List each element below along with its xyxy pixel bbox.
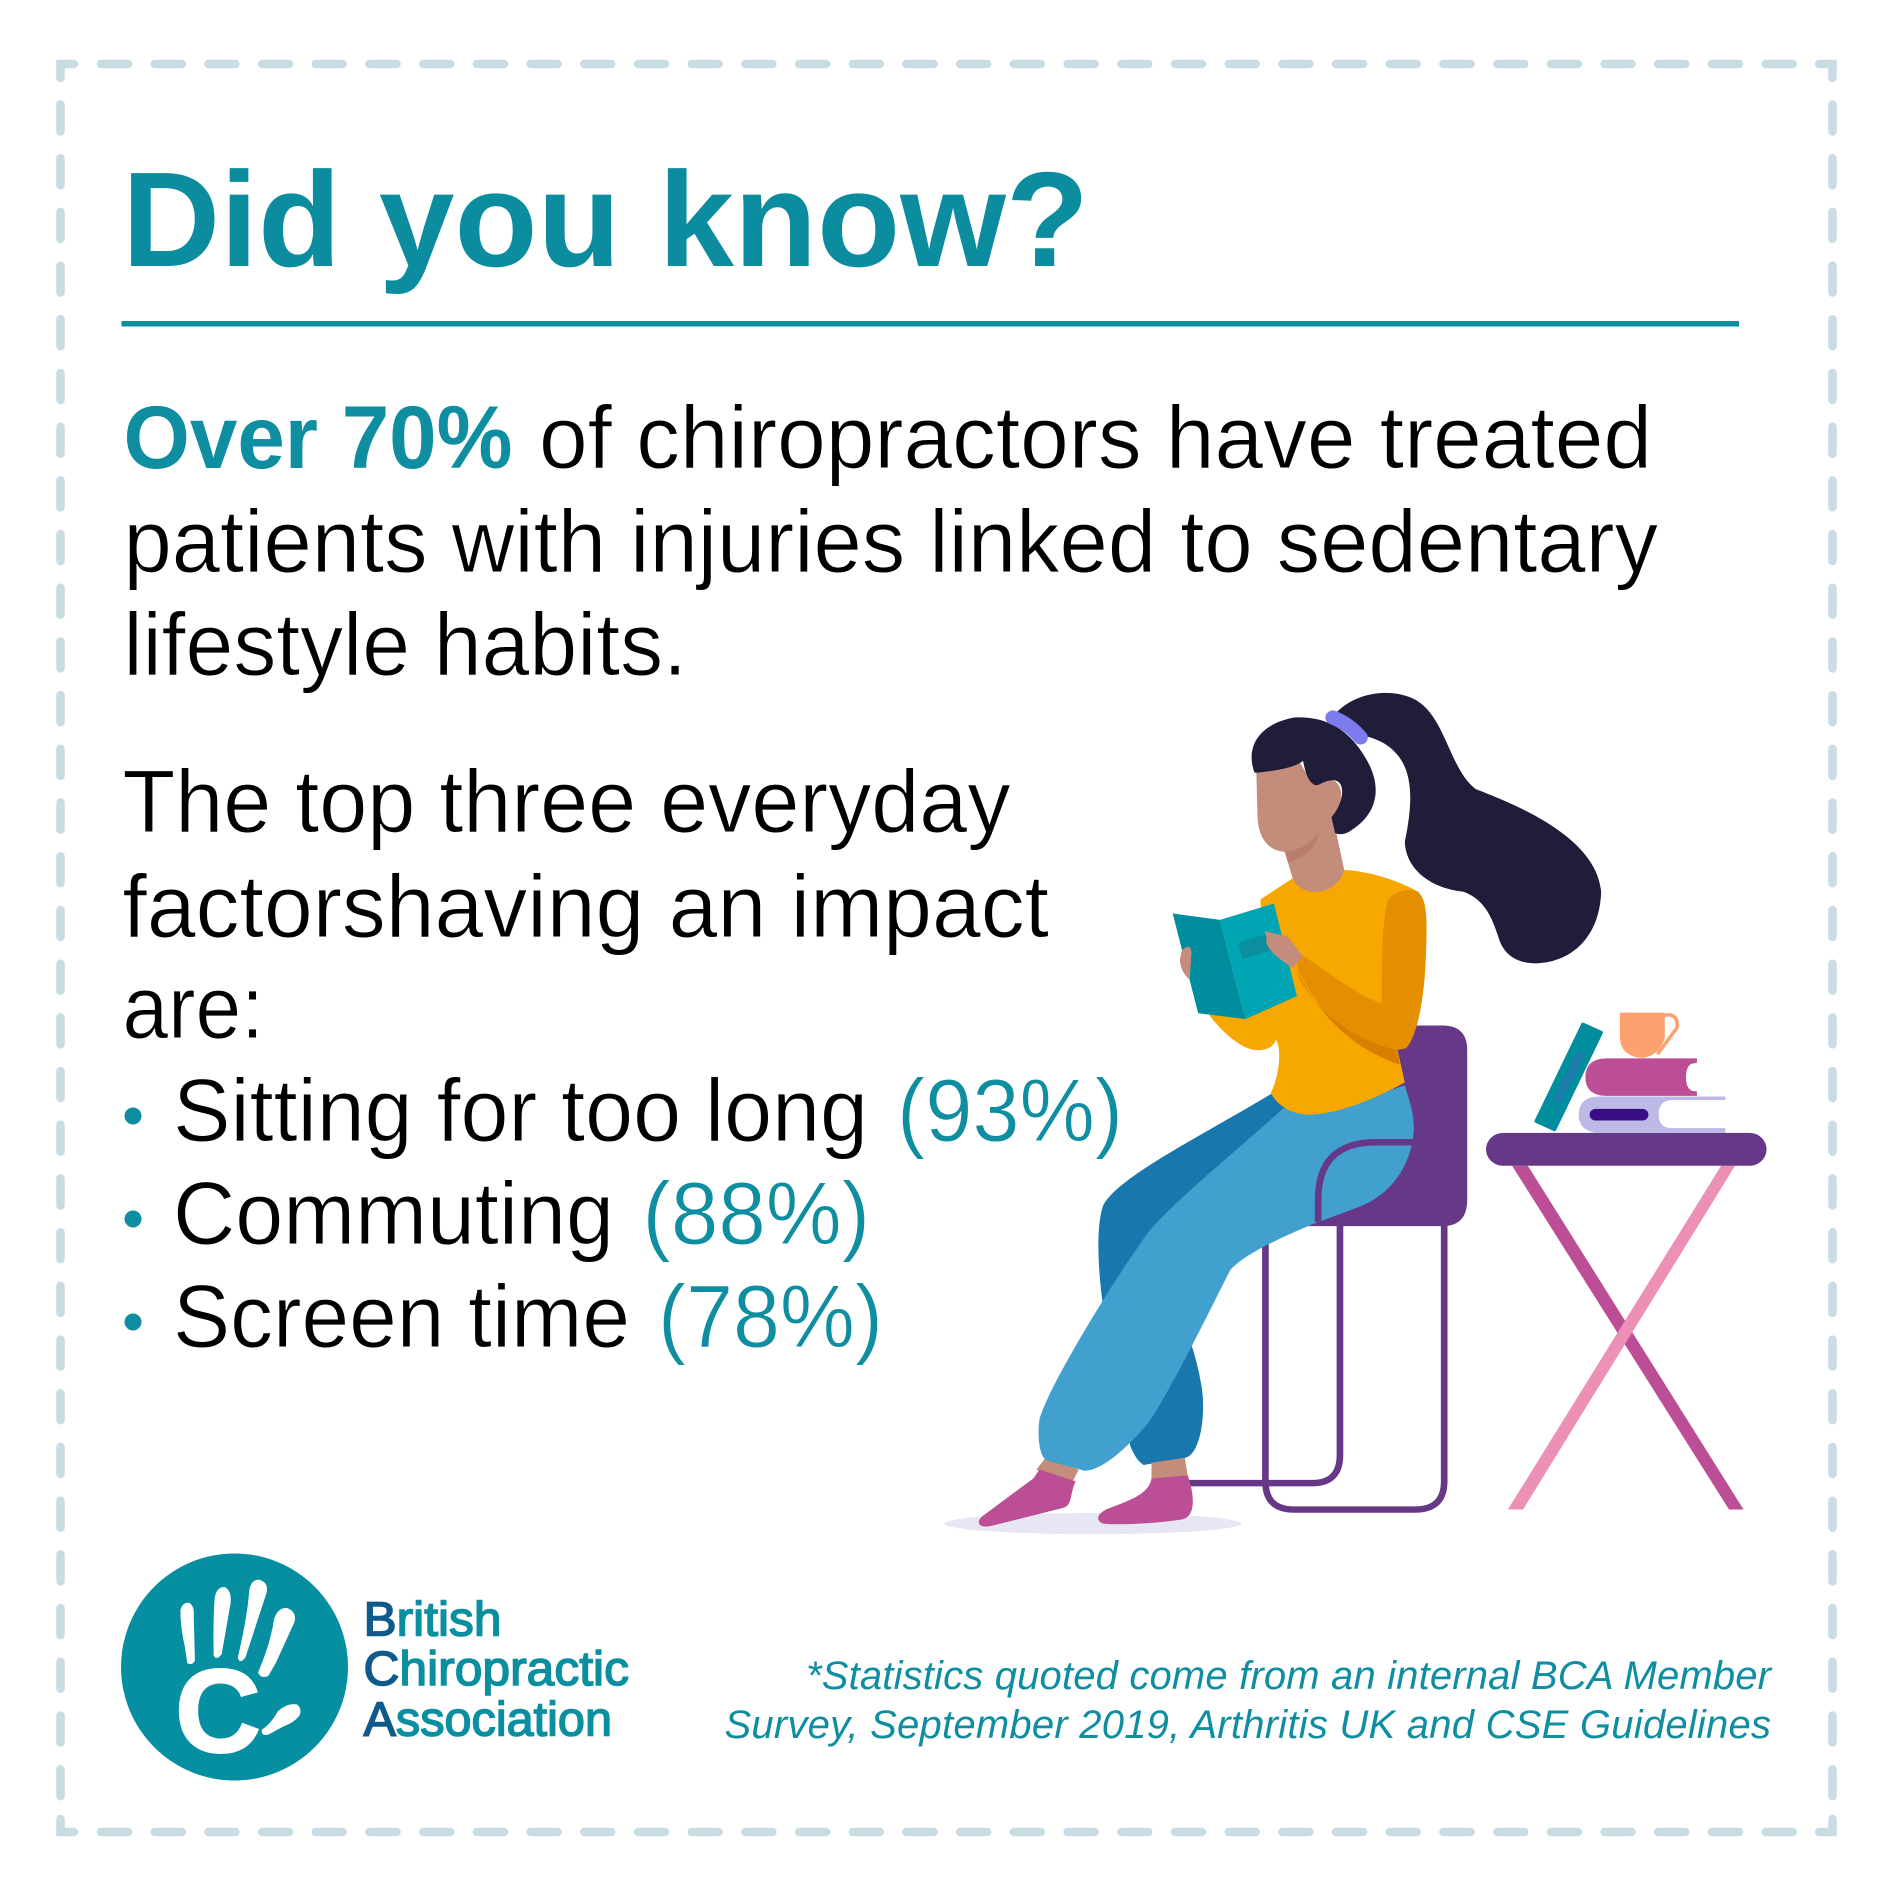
logo wordmark: Association (364, 1694, 612, 1746)
bullet list: factors with percentages: (93%) (897, 1060, 1123, 1160)
text block: headline statistic: lifestyle habits. (124, 594, 687, 694)
open book and hands (1173, 903, 1303, 1019)
sweater (1209, 870, 1427, 1115)
logo badge with hand (121, 1554, 348, 1780)
bullet list: factors with percentages: Commuting (173, 1163, 614, 1263)
logo wordmark: British (364, 1594, 502, 1646)
text block: top three factors intro: factorshaving an impact (122, 856, 1049, 956)
footnote: sources: *Statistics quoted come from an internal BCA Member (806, 1654, 1773, 1698)
logo badge with hand: C (175, 1645, 261, 1778)
title: Did you know? (122, 144, 1089, 295)
logo: British Chiropractic Association (121, 1554, 629, 1780)
text block: headline statistic (124, 387, 1658, 694)
footnote: sources: Survey, September 2019, Arthritis UK and CSE Guidelines (724, 1703, 1771, 1747)
stacked books (1579, 1058, 1725, 1133)
bullet list: factors with percentages: Screen time (173, 1266, 630, 1366)
logo wordmark (364, 1594, 629, 1746)
hair (1252, 717, 1376, 834)
illustration: woman reading on a stool beside a table (944, 693, 1767, 1534)
logo wordmark: Chiropractic (364, 1643, 629, 1696)
tablet leaning on books (1536, 1024, 1601, 1129)
footnote: sources (724, 1654, 1773, 1747)
text block: top three factors intro: are: (122, 957, 264, 1057)
bullet list: factors with percentages: (78%) (658, 1266, 883, 1366)
text block: headline statistic: of chiropractors have treated (539, 387, 1652, 487)
bullet list: factors with percentages: Sitting for too long (173, 1060, 868, 1160)
legs (979, 1085, 1414, 1526)
text block: headline statistic: Over 70% (124, 387, 512, 487)
chair (1185, 1026, 1467, 1510)
text block: top three factors intro: The top three everyday (122, 751, 1011, 851)
table (1486, 1133, 1767, 1510)
hair band (1333, 717, 1361, 737)
bullet list: factors with percentages (124, 1060, 1123, 1366)
neck and face (1256, 763, 1344, 892)
ponytail (1335, 693, 1601, 963)
coffee cup (1620, 1013, 1677, 1058)
text block: top three factors intro (122, 751, 1049, 1057)
bullet list: factors with percentages: (88%) (642, 1163, 870, 1263)
text block: headline statistic: patients with injuries linked to sedentary (124, 491, 1658, 591)
